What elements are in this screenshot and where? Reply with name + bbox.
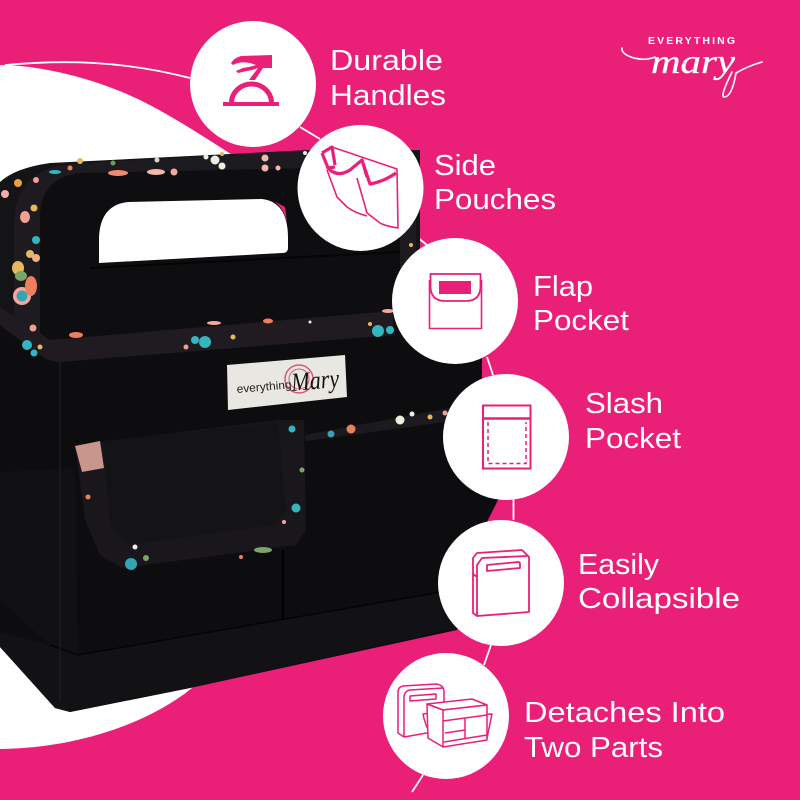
base band bbox=[0, 590, 470, 712]
feature 3: flap pocket: Pocket bbox=[533, 305, 629, 337]
label: Durable bbox=[330, 45, 443, 77]
brand logo: mary bbox=[651, 44, 736, 81]
icon: two side pouches bbox=[322, 147, 398, 228]
feature 6: detaches into two parts: Two Parts bbox=[524, 732, 663, 764]
floral dots on trim bbox=[22, 309, 394, 356]
flap pocket on bag bbox=[75, 420, 306, 570]
feature 1: durable handles bbox=[190, 21, 446, 147]
main body bbox=[0, 310, 498, 712]
icon circle: flap pocket bbox=[392, 238, 518, 364]
icon: hand on handle bbox=[223, 55, 279, 106]
feature 1: durable handles: Handles bbox=[330, 80, 446, 112]
feature 6: detaches into two parts bbox=[383, 653, 725, 779]
label: Side bbox=[434, 150, 496, 182]
inner trim strip bbox=[0, 307, 395, 362]
icon: collapsed organizer bbox=[473, 550, 529, 616]
brand logo bbox=[622, 35, 762, 97]
feature 4: slash pocket: Pocket bbox=[585, 423, 681, 455]
icon circle: handle bbox=[190, 21, 316, 147]
icon circle: two parts bbox=[383, 653, 509, 779]
label: Flap bbox=[533, 271, 593, 303]
connector line bbox=[5, 62, 514, 792]
feature 5: easily collapsible: Collapsible bbox=[578, 583, 740, 615]
icon: slash pocket bbox=[483, 406, 530, 468]
icon circle: collapsible bbox=[438, 520, 564, 646]
feature 2: side pouches: Pouches bbox=[434, 184, 556, 216]
feature 3: flap pocket bbox=[392, 238, 629, 364]
feature 2: side pouches bbox=[298, 125, 556, 251]
feature 4: slash pocket bbox=[443, 374, 681, 500]
slash pocket trim bbox=[305, 408, 452, 441]
label: Detaches Into bbox=[524, 697, 725, 729]
logo plate bbox=[227, 355, 347, 410]
feature 5: easily collapsible bbox=[438, 520, 740, 646]
front handle panel with trim bbox=[14, 150, 416, 345]
icon circle: slash pocket bbox=[443, 374, 569, 500]
floral handle trim bbox=[1, 151, 413, 305]
back panel bbox=[0, 150, 420, 340]
label: Slash bbox=[585, 388, 663, 420]
white background blob bbox=[0, 65, 306, 749]
product photo: black caddy bag bbox=[0, 150, 498, 712]
icon: flap pocket bbox=[430, 274, 482, 328]
label: Easily bbox=[578, 549, 660, 581]
logo plate: everything bbox=[236, 379, 292, 396]
icon circle: pouches bbox=[298, 125, 424, 251]
brand logo: EVERYTHING bbox=[648, 35, 735, 47]
icon: two detached parts bbox=[398, 684, 492, 747]
handle cutout bbox=[99, 199, 288, 263]
logo plate: Mary bbox=[289, 364, 341, 397]
